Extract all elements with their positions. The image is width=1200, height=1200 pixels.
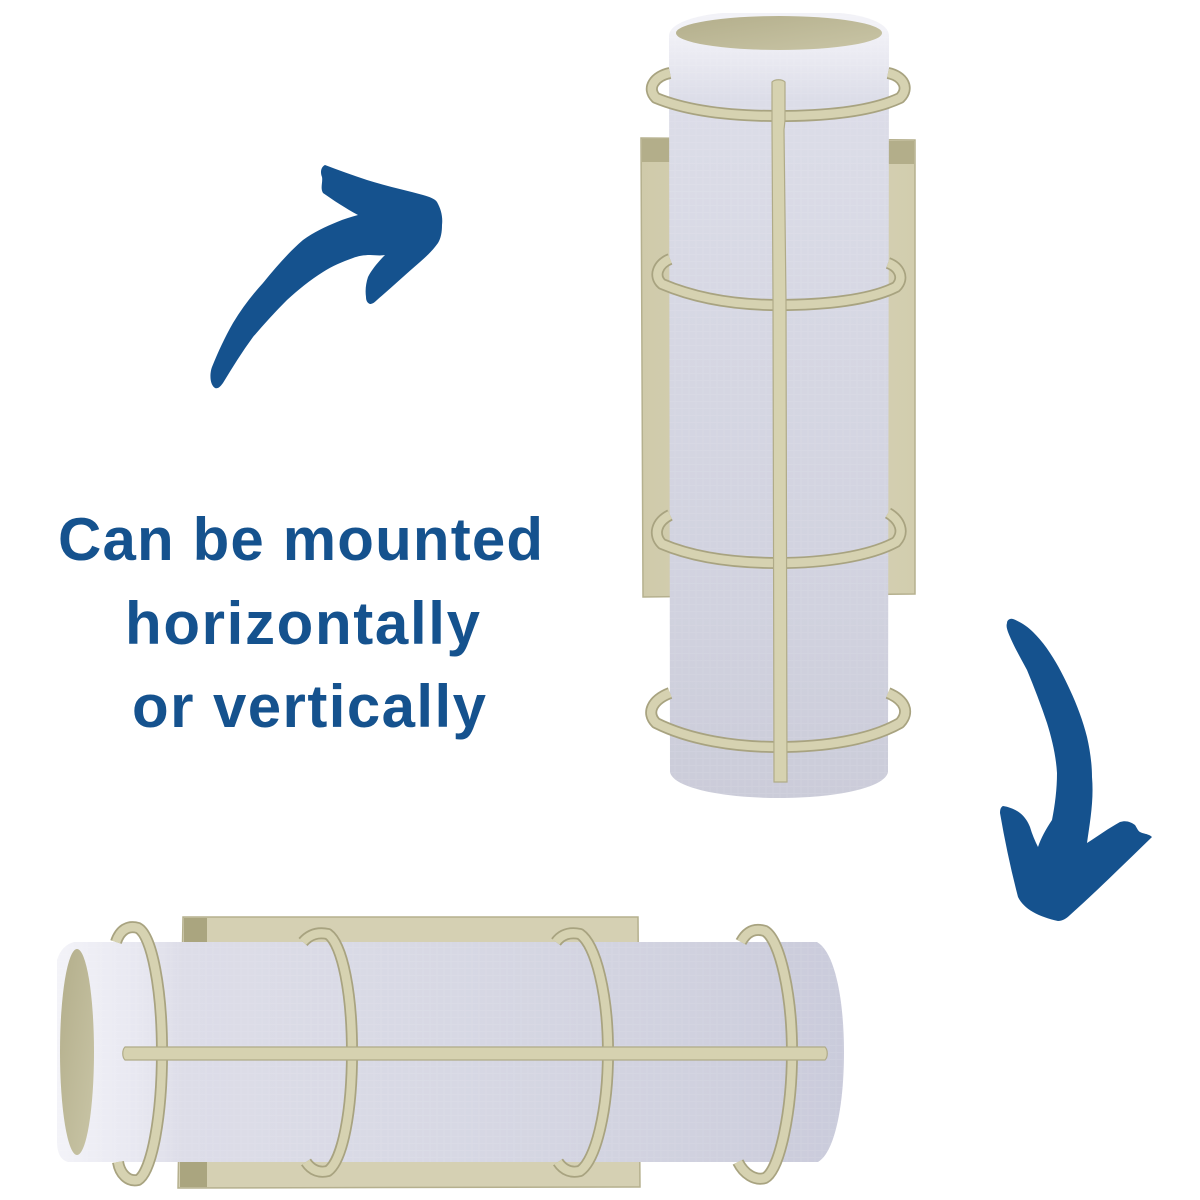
heading: mounting text: horizontally	[125, 590, 481, 657]
end opening	[60, 949, 94, 1155]
heading: mounting text	[58, 506, 543, 740]
horizontal sconce	[57, 917, 844, 1188]
ring 3	[657, 513, 901, 563]
ring 1	[652, 73, 905, 116]
arrow: curved up-right	[210, 165, 442, 388]
cage horizontal bar	[123, 1047, 827, 1060]
glass cylinder	[669, 13, 889, 798]
cage vertical bar	[772, 80, 787, 782]
vertical sconce	[641, 13, 915, 798]
heading: mounting text: Can be mounted	[58, 506, 543, 573]
heading: mounting text: or vertically	[132, 673, 487, 740]
arrow: curved down-right	[1000, 619, 1152, 921]
ring 2	[657, 259, 900, 305]
glass cylinder	[57, 942, 844, 1162]
backplate	[178, 917, 640, 1188]
ring 4	[738, 930, 792, 1179]
ring 1	[116, 927, 162, 1180]
ring 4	[651, 693, 905, 747]
backplate	[641, 138, 915, 597]
ring 2	[303, 933, 352, 1172]
ring 3	[556, 933, 608, 1172]
top opening	[676, 16, 882, 50]
